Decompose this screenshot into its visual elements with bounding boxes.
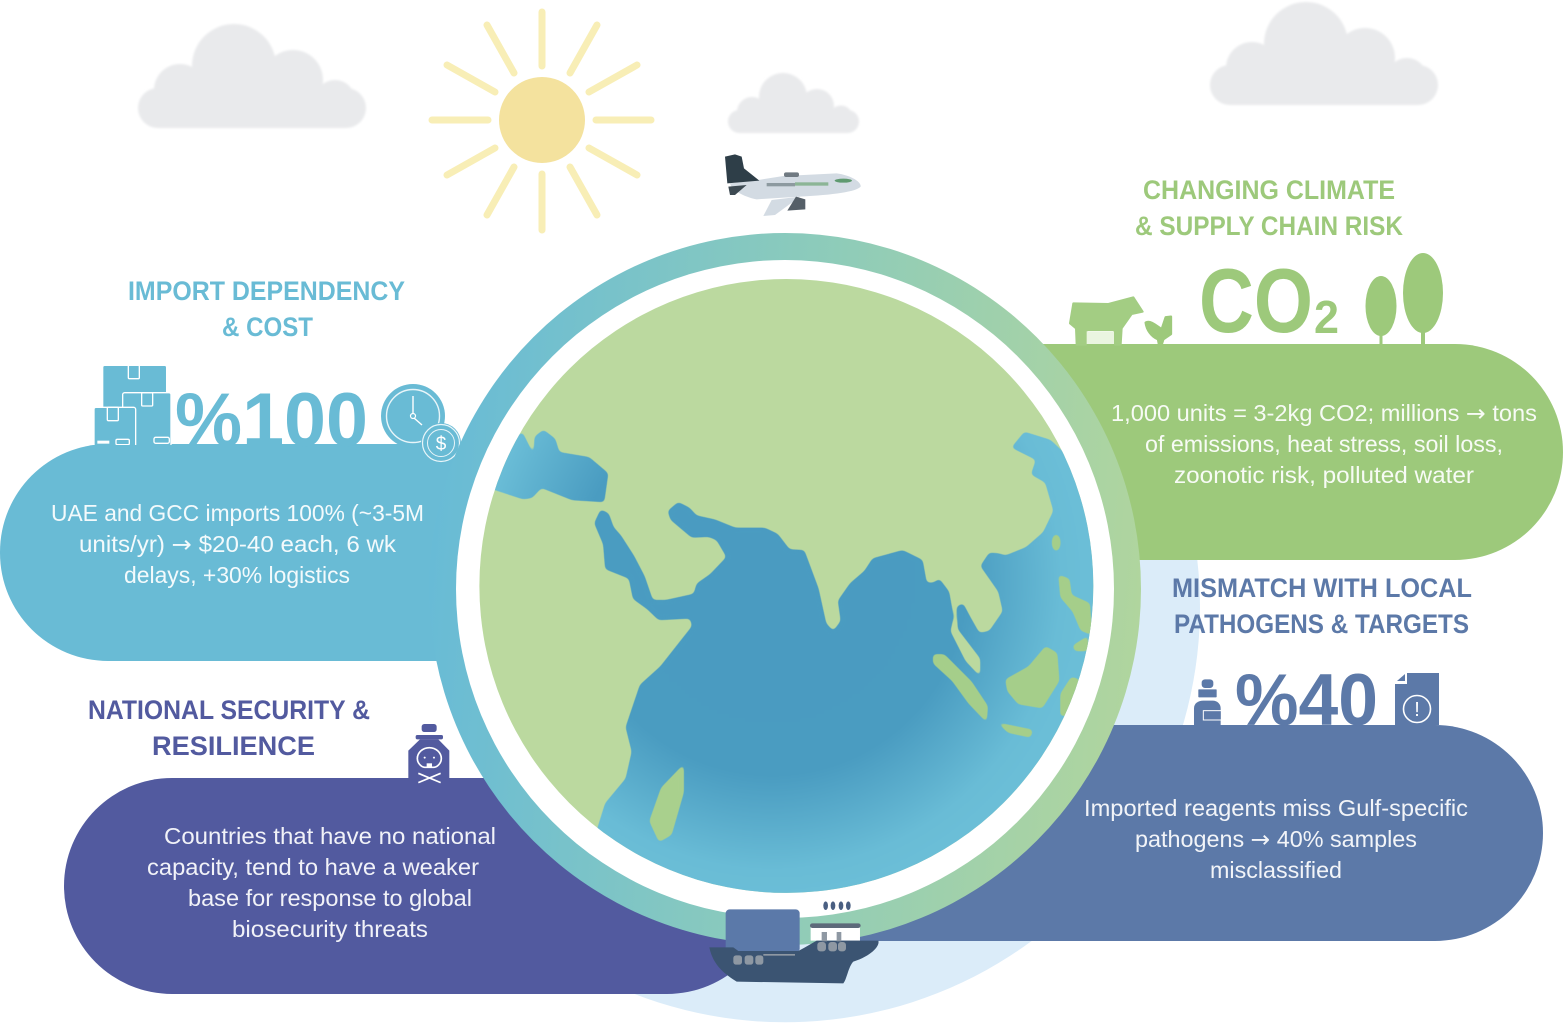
heading: changing climate <box>1135 175 1403 241</box>
text: mismatch body: Imported reagents miss Gulf-specific <box>1084 795 1468 821</box>
text: national security body: capacity, tend to have a weaker <box>147 854 479 880</box>
ocean: Indian Ocean and Pacific <box>594 432 1123 923</box>
text: changing climate body: of emissions, heat stress, soil loss, <box>1145 431 1503 457</box>
heading: import dependency: & COST <box>222 312 313 342</box>
icon: document with alert: ! <box>1414 699 1420 721</box>
icon: cow <box>1070 297 1143 345</box>
icon: cargo ship <box>709 901 879 983</box>
icon: small tree <box>1366 276 1396 346</box>
stat: CO2: 2 <box>1314 291 1339 343</box>
icon: cardboard boxes <box>94 365 171 454</box>
heading: changing climate: & SUPPLY CHAIN RISK <box>1135 211 1403 241</box>
gradient ring around globe <box>429 233 1141 945</box>
heading: mismatch: MISMATCH WITH LOCAL <box>1172 573 1472 603</box>
heading: import dependency: IMPORT DEPENDENCY <box>128 276 405 306</box>
text: import dependency body: UAE and GCC imports 100% (~3-5M <box>51 500 424 526</box>
heading: changing climate: CHANGING CLIMATE <box>1143 175 1395 205</box>
text: national security body: Countries that have no national <box>164 823 496 849</box>
icon: reagent bottle <box>1194 679 1221 725</box>
text: mismatch body: pathogens → 40% samples <box>1135 826 1417 853</box>
panel pill: mismatch <box>660 725 1543 941</box>
islands <box>649 534 1092 842</box>
icon: clock with coin <box>381 384 461 463</box>
heading: national security: NATIONAL SECURITY & <box>88 695 370 725</box>
cloud: left <box>138 24 366 128</box>
icon: airplane <box>725 154 861 216</box>
panel pill: national security <box>64 778 775 994</box>
heading: national security: RESILIENCE <box>152 731 315 761</box>
globe <box>479 279 1094 893</box>
text: changing climate body <box>1111 400 1537 488</box>
text: import dependency body: delays, +30% logistics <box>124 562 350 588</box>
ocean: Mediterranean and Black Sea <box>470 430 608 502</box>
panel pill: changing climate <box>900 344 1563 560</box>
heading: national security <box>88 695 370 761</box>
icon: chicken <box>1146 317 1171 345</box>
stat: percent 100: %100 <box>175 378 368 463</box>
text: national security body: base for response to global <box>188 885 472 911</box>
pale blue background circle <box>620 560 1200 1022</box>
icon: sun <box>432 12 651 230</box>
icon: tall tree <box>1403 253 1443 346</box>
text: changing climate body: 1,000 units = 3-2kg CO2; millions → tons <box>1111 400 1537 427</box>
icon: document with alert <box>1395 673 1439 725</box>
stat: percent 40: %40 <box>1235 660 1378 741</box>
icon: clock with coin: $ <box>436 434 447 455</box>
stat: CO2: CO <box>1199 251 1313 352</box>
text: import dependency body: units/yr) → $20-40 each, 6 wk <box>79 531 397 558</box>
heading: mismatch: PATHOGENS & TARGETS <box>1174 609 1469 639</box>
cloud: right <box>1210 2 1438 105</box>
text: national security body <box>147 823 496 942</box>
heading: import dependency <box>128 276 405 342</box>
panel pill: import dependency <box>0 444 620 661</box>
text: mismatch body <box>1084 795 1468 883</box>
heading: mismatch <box>1172 573 1472 639</box>
text: changing climate body: zoonotic risk, polluted water <box>1174 462 1474 488</box>
text: import dependency body <box>51 500 424 588</box>
cloud: middle <box>728 73 859 133</box>
text: national security body: biosecurity threats <box>232 916 428 942</box>
icon: poison bottle <box>408 724 449 783</box>
text: mismatch body: misclassified <box>1210 857 1342 883</box>
